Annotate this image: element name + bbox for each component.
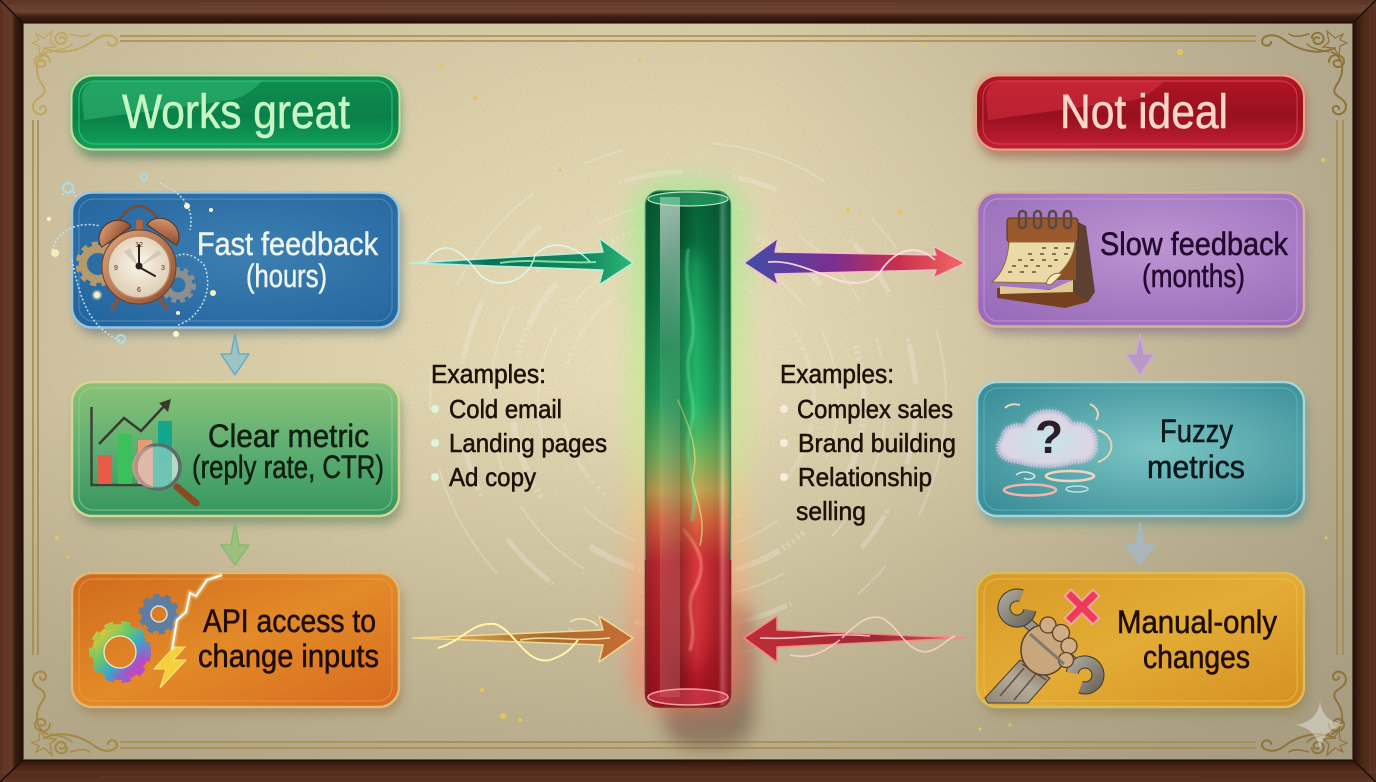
examples list: not ideal: Examples: xyxy=(780,361,894,389)
list items: Relationship xyxy=(798,462,932,492)
gauge: glass meter tube xyxy=(630,180,754,748)
bullet points xyxy=(431,405,439,481)
panel: API access xyxy=(72,573,402,714)
arrow: blue down xyxy=(221,334,249,375)
icon: fuzzy cloud with question mark xyxy=(998,404,1112,496)
label text: Fast feedback xyxy=(197,226,379,262)
arrow: manual-only to meter xyxy=(744,616,965,662)
icon: alarm clock with gears and sparkles: 9 xyxy=(114,265,118,272)
label text: change inputs xyxy=(198,638,379,674)
examples list: not ideal xyxy=(780,361,956,526)
icon: gears with lightning xyxy=(92,575,222,688)
panel: clear metric xyxy=(72,382,402,524)
list items xyxy=(449,394,607,492)
list items: Complex sales xyxy=(797,394,953,424)
label text xyxy=(197,226,379,294)
label text: (reply rate, CTR) xyxy=(192,449,384,485)
label text: Clear metric xyxy=(208,418,369,454)
label text: (months) xyxy=(1142,258,1245,294)
list items: selling xyxy=(796,496,866,526)
label text xyxy=(1100,226,1289,294)
icon: hand holding wrench with red cross xyxy=(985,579,1110,703)
list items: Landing pages xyxy=(449,428,607,458)
panel: fuzzy metrics xyxy=(977,382,1307,524)
gears xyxy=(78,244,194,301)
label text: Slow feedback xyxy=(1100,226,1289,262)
watermark star xyxy=(1296,701,1344,750)
icon: bar chart with magnifier xyxy=(92,399,196,503)
arrow: API access to meter xyxy=(413,616,633,662)
label text xyxy=(1147,413,1245,485)
heading text: Works great xyxy=(122,86,350,139)
icon: desk calendar xyxy=(992,211,1095,308)
label text xyxy=(192,418,384,485)
icon: alarm clock with gears and sparkles xyxy=(47,174,216,343)
examples list: works great xyxy=(431,361,607,492)
bullet points xyxy=(780,405,788,481)
examples list: works great: Examples: xyxy=(431,361,546,389)
label text: API access to xyxy=(203,603,376,639)
label text: Manual-only xyxy=(1117,604,1277,640)
label text xyxy=(198,603,379,674)
list items xyxy=(796,394,956,526)
panel: fast feedback xyxy=(47,174,402,343)
icon: alarm clock with gears and sparkles: 3 xyxy=(161,265,165,272)
list items: Ad copy xyxy=(449,462,536,492)
icon: alarm clock with gears and sparkles: 6 xyxy=(137,287,141,294)
arrow: green down xyxy=(221,523,249,565)
heading text: Not ideal xyxy=(1060,86,1228,139)
panel: slow feedback xyxy=(977,192,1307,334)
arrow: fast feedback to meter xyxy=(410,238,633,285)
label text: (hours) xyxy=(246,258,327,294)
header: Works great xyxy=(70,74,401,158)
energy streaks xyxy=(674,250,710,670)
label text: changes xyxy=(1143,639,1250,675)
panel: manual-only changes xyxy=(977,573,1307,714)
list items: Brand building xyxy=(798,428,956,458)
arrow: slow feedback double-headed xyxy=(744,238,965,285)
list items: Cold email xyxy=(449,394,562,424)
label text: metrics xyxy=(1147,449,1245,485)
icon: fuzzy cloud with question mark: ? xyxy=(1035,411,1063,463)
label text: Fuzzy xyxy=(1160,413,1233,449)
label text xyxy=(1117,604,1277,675)
header: Not ideal xyxy=(974,74,1306,158)
arrow: purple down xyxy=(1126,334,1154,375)
data rings behind the meter xyxy=(430,142,946,658)
icon: alarm clock with gears and sparkles: 12 xyxy=(135,242,143,249)
arrow: blue-grey down xyxy=(1126,523,1154,565)
